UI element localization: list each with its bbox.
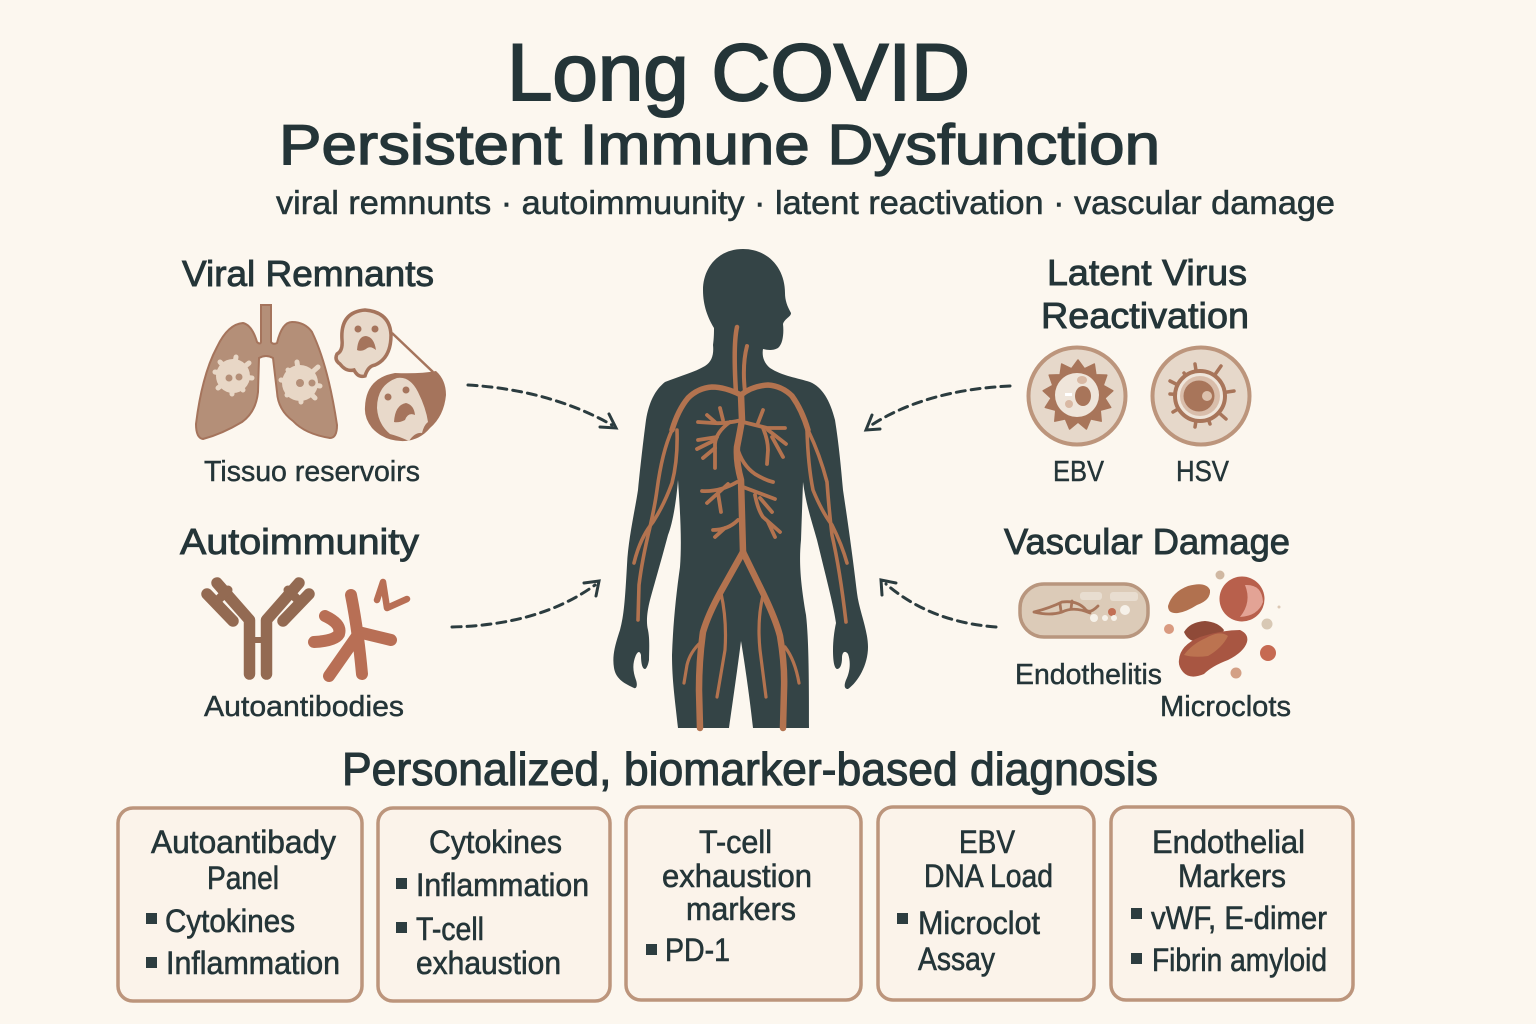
- card: T-cell exhaustion markers: [626, 807, 861, 1000]
- title: Long COVID: [507, 28, 970, 118]
- card: EBV DNA load: DNA Load: [924, 858, 1053, 894]
- label: autoantibodies: Autoantibodies: [204, 691, 404, 723]
- card: cytokines: Inflammation: [416, 867, 589, 903]
- card: cytokines: Cytokines: [429, 824, 562, 860]
- label: endothelitis: Endothelitis: [1015, 659, 1162, 691]
- icon: HSV: [1152, 348, 1250, 444]
- central figure: human silhouette with vessels: [613, 249, 868, 728]
- icon: viral ghost in tissue: [365, 333, 446, 441]
- label: EBV: EBV: [1053, 456, 1105, 488]
- panel: latent virus reactivation: [1028, 252, 1250, 488]
- label: microclots: Microclots: [1160, 691, 1291, 723]
- tagline: viral remnunts · autoimmuunity · latent reactivation · vascular damage: [276, 184, 1335, 221]
- card: endothelial markers: Endothelial: [1152, 824, 1305, 860]
- panel: vascular damage: [1004, 521, 1291, 723]
- subtitle: Persistent Immune Dysfunction: [279, 113, 1160, 177]
- heading: latent virus reactivation: Reactivation: [1041, 295, 1249, 336]
- icon: viral ghost upper: [336, 310, 391, 376]
- panel: autoimmunity: [180, 521, 419, 723]
- arrow: vascular damage to body: [881, 580, 996, 627]
- card: endothelial markers: vWF, E-dimer: [1151, 900, 1327, 936]
- card: autoantibody panel: Inflammation: [166, 945, 340, 981]
- icon: antibody: [207, 583, 309, 674]
- arrow: viral remnants to body: [468, 385, 616, 428]
- icon: inflamed vessel: [1020, 584, 1148, 637]
- card: EBV DNA load: Microclot: [918, 905, 1040, 941]
- label: tissue reservoirs: Tissuo reservoirs: [204, 456, 420, 488]
- label: HSV: HSV: [1176, 456, 1230, 488]
- card: T-cell exhaustion markers: T-cell: [699, 824, 772, 860]
- card: endothelial markers: [1111, 807, 1353, 1000]
- heading: latent virus reactivation: Latent Virus: [1047, 252, 1247, 293]
- card: autoantibody panel: Cytokines: [165, 903, 295, 939]
- card: EBV DNA load: Assay: [918, 941, 995, 977]
- vessels: [634, 327, 847, 728]
- card: EBV DNA load: [878, 807, 1094, 1000]
- card: cytokines: [378, 808, 610, 1001]
- icon: EBV: [1028, 348, 1126, 444]
- heading: autoimmunity: Autoimmunity: [180, 521, 419, 562]
- card: cytokines: exhaustion: [416, 945, 561, 981]
- arrow: autoimmunity to body: [452, 581, 599, 627]
- heading: viral remnants: Viral Remnants: [182, 253, 434, 294]
- card: T-cell exhaustion markers: exhaustion: [662, 858, 812, 894]
- card: endothelial markers: Markers: [1178, 858, 1286, 894]
- card: cytokines: T-cell: [416, 911, 484, 947]
- card: endothelial markers: Fibrin amyloid: [1152, 942, 1327, 978]
- card: EBV DNA load: EBV: [959, 824, 1016, 860]
- icon: microclots: [1164, 570, 1280, 678]
- heading: latent virus reactivation: [1041, 252, 1249, 336]
- card: autoantibody panel: Panel: [207, 860, 279, 896]
- card: T-cell exhaustion markers: PD-1: [665, 932, 730, 968]
- card: autoantibody panel: Autoantibady: [151, 824, 336, 860]
- arrow: latent virus to body: [866, 386, 1010, 430]
- panel: viral remnants: [182, 253, 446, 488]
- heading: vascular damage: Vascular Damage: [1004, 521, 1290, 562]
- icon: damaged antibody: [314, 582, 407, 676]
- card: autoantibody panel: [118, 808, 362, 1001]
- silhouette: [613, 249, 868, 728]
- icon: lungs: [196, 305, 337, 439]
- card: T-cell exhaustion markers: markers: [686, 891, 796, 927]
- section heading: diagnosis: Personalized, biomarker-based diagnosis: [342, 743, 1158, 795]
